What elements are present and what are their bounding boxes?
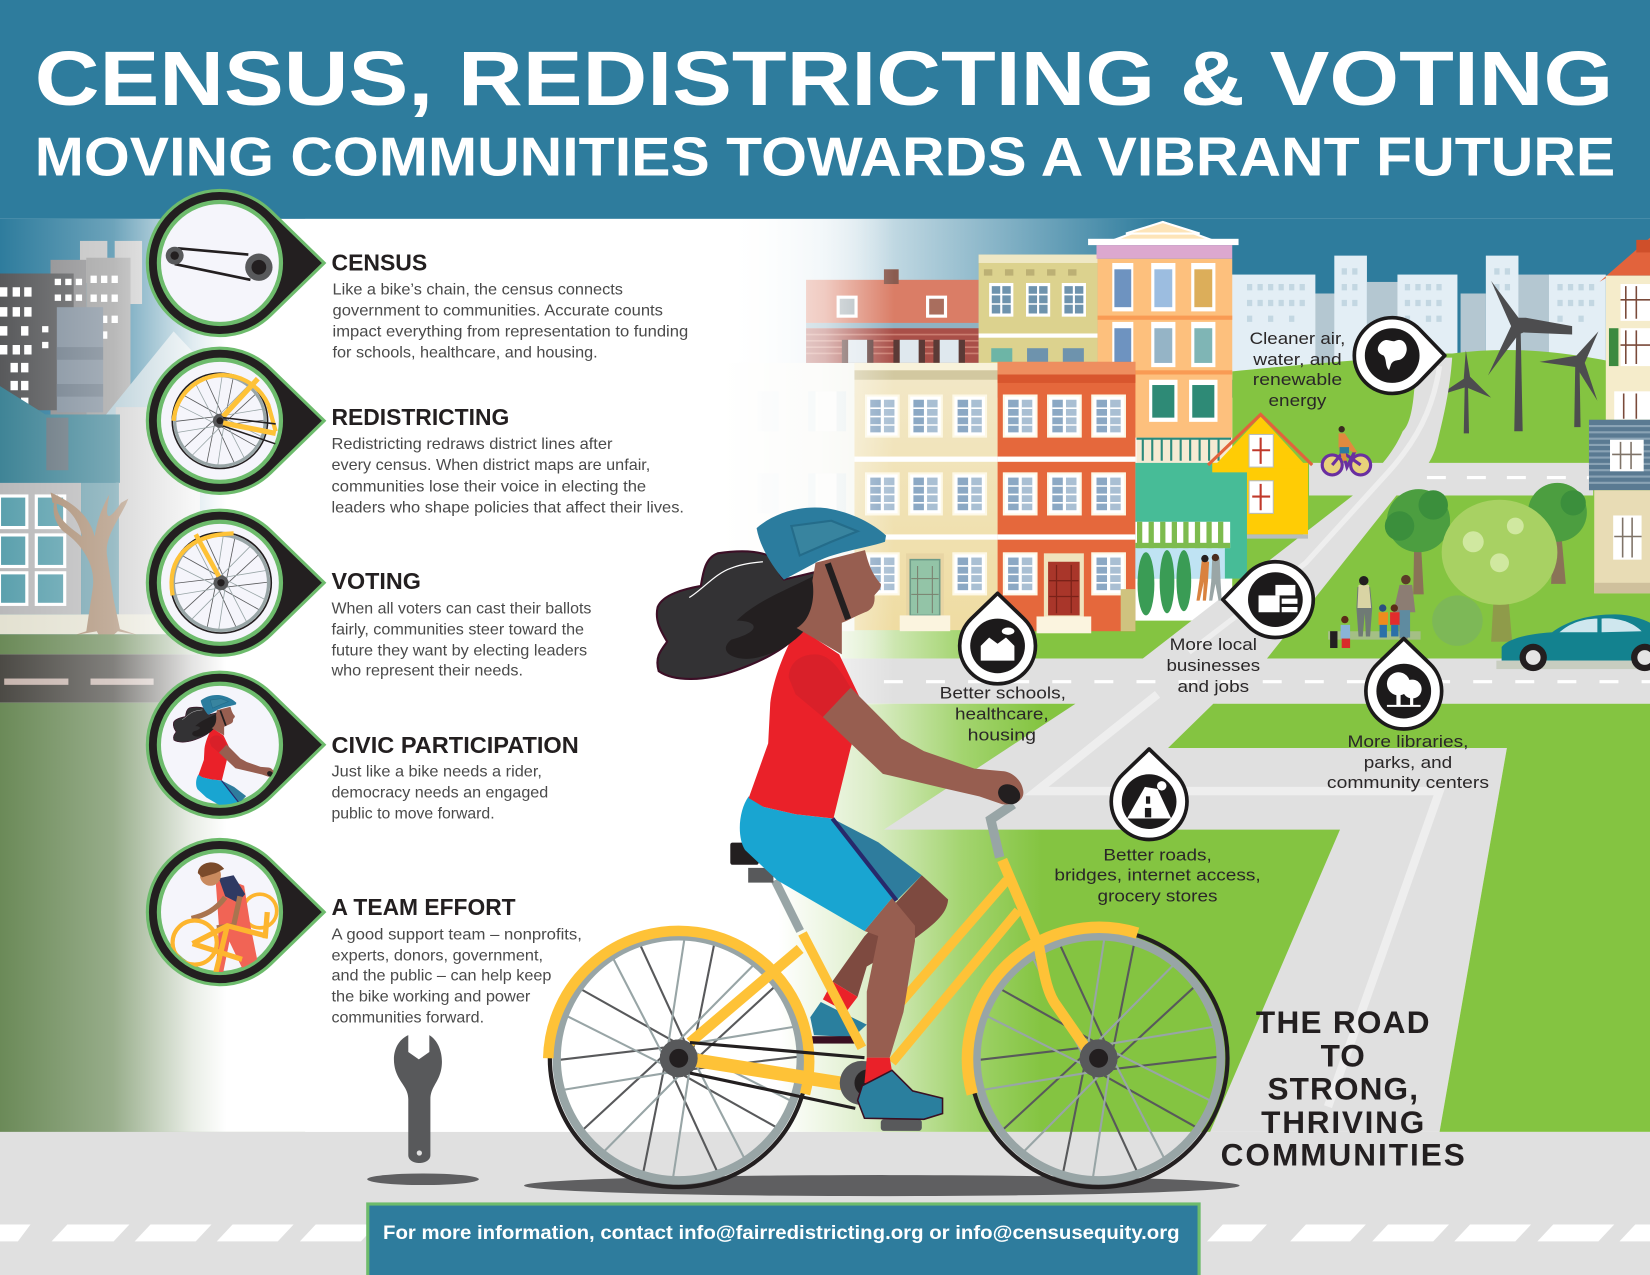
left scene: faded grey city (0, 219, 337, 1132)
section: redistricting (331, 404, 684, 516)
callout: cleaner air: water, and (1252, 350, 1342, 369)
callout: libraries and parks: parks, and (1364, 753, 1452, 772)
wrench shadow (367, 1173, 479, 1185)
red mansard building (806, 269, 979, 363)
callout: better schools: healthcare, (955, 705, 1049, 724)
callout: better schools (940, 593, 1066, 745)
wind turbines (1438, 281, 1598, 433)
callout: libraries and parks (1327, 639, 1489, 792)
bicycle and rider (548, 507, 1228, 1187)
section: redistricting: every census. When district maps are unfair, (331, 457, 650, 474)
section: voting: fairly, communities steer toward the (331, 621, 584, 638)
section: team effort: communities forward. (331, 1010, 484, 1027)
teal car (1496, 614, 1650, 671)
bottom road (0, 1132, 1650, 1275)
teal storefront (1135, 463, 1247, 615)
section: voting: future they want by electing leaders (331, 642, 587, 659)
callout: better roads: bridges, internet access, (1054, 866, 1261, 885)
section: team effort: and the public – can help keep (331, 967, 552, 984)
fade of upper scene into white (716, 219, 900, 705)
section: voting: When all voters can cast their ballots (331, 600, 592, 617)
callout: cleaner air: renewable (1253, 370, 1342, 389)
right scene: green ground (842, 350, 1650, 659)
road title: STRONG, (1267, 1070, 1418, 1106)
marker: team effort mechanic (147, 839, 324, 985)
icon: wrench (394, 1035, 442, 1163)
callout: better roads: grocery stores (1098, 887, 1218, 906)
marker: voting wheel (147, 510, 324, 655)
bike shadow (524, 1175, 1240, 1196)
orange tall building (1088, 222, 1239, 463)
family walking (1328, 575, 1421, 648)
callout: better schools: housing (968, 726, 1036, 745)
red-orange rowhouse (998, 362, 1135, 633)
trees (1385, 483, 1587, 646)
section: census: Like a bike’s chain, the census connects (333, 282, 623, 299)
right edge houses (1589, 238, 1650, 593)
road title: TO (1321, 1038, 1365, 1074)
marker: civic participation rider (147, 672, 324, 817)
callout: cleaner air: Cleaner air, (1250, 329, 1345, 348)
section: voting (330, 568, 592, 679)
right scene: sky and skyline (716, 219, 1650, 398)
section: team effort (331, 894, 582, 1027)
callout: libraries and parks: More libraries, (1347, 732, 1468, 751)
pediment above header edge (1126, 222, 1200, 234)
subtitle: MOVING COMMUNITIES TOWARDS A VIBRANT FUTURE (35, 126, 1615, 188)
section: civic participation: Just like a bike needs a rider, (331, 763, 542, 780)
callout: better roads (1054, 749, 1261, 906)
callout: local businesses: businesses (1166, 656, 1260, 675)
road title: COMMUNITIES (1221, 1137, 1465, 1173)
callout: local businesses (1166, 562, 1313, 696)
section: civic participation: democracy needs an engaged (331, 784, 548, 801)
section: civic participation (331, 732, 579, 822)
section: census: CENSUS (331, 249, 427, 275)
road title: THE ROAD (1256, 1004, 1430, 1040)
cream rowhouse (854, 363, 998, 631)
callout: cleaner air (1250, 318, 1445, 410)
distant cyclist (1322, 426, 1371, 475)
section: census: for schools, healthcare, and housing. (333, 345, 598, 362)
roads (821, 358, 1650, 1132)
lower right grass (1168, 704, 1650, 1132)
footer contact box: For more information, contact info@fairredistricting.org or info@censusequity.org (383, 1222, 1180, 1244)
section: redistricting: Redistricting redraws district lines after (331, 436, 612, 453)
section: team effort: experts, donors, government, (331, 947, 543, 964)
callout: better roads: Better roads, (1103, 846, 1212, 865)
section: redistricting: communities lose their voice in electing the (331, 478, 646, 495)
callout: local businesses: More local (1170, 635, 1257, 654)
callout: local businesses: and jobs (1178, 677, 1249, 696)
section: team effort: the bike working and power (331, 988, 530, 1005)
section: civic participation: public to move forward. (331, 805, 495, 822)
section: team effort: A TEAM EFFORT (331, 894, 516, 920)
pale faded building (724, 363, 854, 631)
section: voting: VOTING (331, 568, 421, 594)
section: census: impact everything from representation to funding (333, 324, 688, 341)
footer contact box (368, 1204, 1199, 1275)
section: census: government to communities. Accurate counts (333, 303, 663, 320)
road title: THRIVING (1261, 1104, 1424, 1140)
callout: libraries and parks: community centers (1327, 773, 1489, 792)
road title (1221, 1004, 1465, 1173)
section: census (331, 249, 688, 362)
section: redistricting: leaders who shape policies that affect their lives. (331, 499, 684, 516)
marker: census chain (147, 190, 324, 336)
lower left grass (737, 704, 1340, 1132)
header band (0, 0, 1650, 219)
callout: better schools: Better schools, (940, 684, 1066, 703)
section: voting: who represent their needs. (330, 662, 523, 679)
callout: cleaner air: energy (1269, 391, 1327, 410)
section: team effort: A good support team – nonprofits, (331, 926, 582, 943)
section: civic participation: CIVIC PARTICIPATION (331, 732, 579, 758)
marker: redistricting wheel (147, 348, 324, 493)
title: CENSUS, REDISTRICTING & VOTING (35, 36, 1613, 122)
tan building (979, 255, 1098, 364)
yellow house (1208, 414, 1312, 539)
section: redistricting: REDISTRICTING (331, 404, 509, 430)
